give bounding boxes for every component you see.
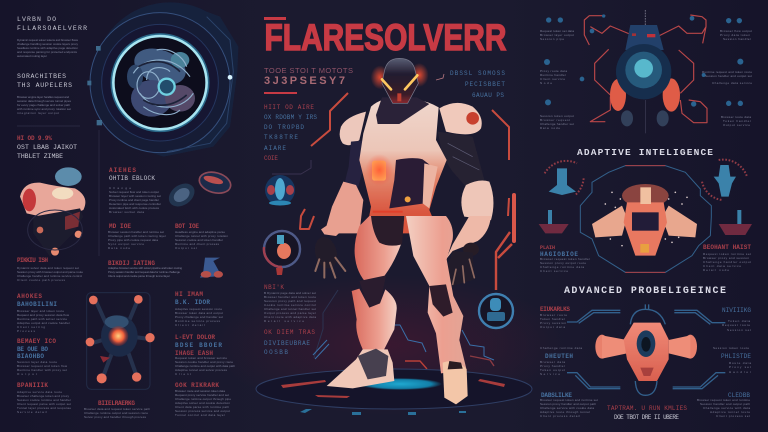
text block: intro: challenge handling session cookie layers proxy [17, 42, 78, 46]
text block: lower left stack: Service detail [17, 410, 47, 414]
text block: center right list: DBSSL SOMOSS [450, 70, 505, 77]
text block: right of bot: Tunnel control and data layer [175, 413, 225, 417]
text block: dome labels: Request token runtime set [703, 252, 751, 256]
text block: lower left stack: AHOKES [17, 293, 42, 300]
small icons [544, 14, 743, 107]
heading: sorachitbes: SORACHITBES [17, 73, 66, 80]
robot: main figure [312, 58, 493, 404]
text block: ship labels: DHEUTEH [545, 353, 573, 360]
icon: circle target left [264, 231, 300, 275]
text block: top-right labels: Proxy data token [720, 33, 750, 37]
text block: right of bot: Proxy challenge and handler set [175, 315, 223, 319]
text block: ship labels: Service [540, 372, 560, 376]
text block: bot caption [84, 400, 150, 419]
text block: center lower left: OK DIEM TRAS [264, 329, 315, 336]
text block: ship labels: Session set [727, 328, 751, 332]
text block: lower left stack: Session cookie runtime and handler [17, 398, 71, 402]
text block: ship labels: Browser request token and runtime set [540, 398, 598, 402]
dome frame [580, 166, 711, 272]
text block: dome labels: Detail node [703, 268, 729, 272]
text block: center left list: OX RDOBM Y IRS [264, 114, 317, 121]
heading: sorachitbes [17, 73, 72, 89]
text block: dome labels: Browser proxy and session [703, 256, 749, 260]
text block: ship labels: Client process detail [540, 414, 580, 418]
text block: center lower left: Browser handler and token route [264, 295, 316, 299]
subtitle: TOOE STOI T MOTOTS [264, 66, 353, 75]
text block: ship labels: Session proxy handler and output path [540, 402, 596, 406]
text block: ship labels: PHLISTDE [721, 353, 751, 360]
text block: ahees: OHTIB EBLOCK [109, 175, 155, 182]
connectors [567, 304, 725, 395]
text block: right of bot: Request token and browser service [175, 356, 227, 360]
text block: center lower left: NBI'K [264, 284, 284, 291]
text block: bot ioe: Session cookie and token handler [175, 238, 223, 242]
text block: right of bot: Runtime service process [175, 319, 220, 323]
text block: top-right labels: Browser flow output [720, 29, 752, 33]
heading: sorachitbes: TH3 AUPELERS [17, 82, 72, 89]
text block: lower left stack: BE OUE BO [17, 346, 48, 353]
text block: top-right labels: Challenge data service [712, 81, 752, 85]
text block: ship labels: EIUKARLKS [540, 306, 570, 313]
text block: lower left stack: BAHOBILINI [17, 301, 57, 308]
text block: md ioe: Challenge path with token routing layer [108, 234, 166, 238]
text block: lower left stack: BIAOHBO [17, 353, 44, 360]
text block: architecture [17, 95, 72, 115]
text block: lower left stack: Dynamic solver data and token request set [17, 266, 79, 270]
text block: bikdij: BIKDIJ IATING [108, 260, 155, 267]
text block: lower left stack: Client cookie path process [17, 278, 66, 282]
text block: top-right labels: Session pipe [540, 37, 564, 41]
text block: ship labels: Adaptive route through tunnel [540, 410, 590, 414]
text block: center right list: 6AUAU PS [472, 92, 504, 99]
text block: center right list [436, 70, 505, 99]
heading: advanced: ADVANCED PROBELIGEINCE [564, 286, 726, 297]
heading: stat: OST LBAB JAIKOT [17, 144, 77, 151]
text block: md ioe: Browser session handler and runtime set [108, 230, 164, 234]
icon: globe bot [265, 175, 295, 206]
text block: ship labels [540, 306, 751, 418]
ship body [595, 323, 697, 381]
text block: ship labels: Session token route [713, 346, 749, 350]
text block: md ioe: Proxy pipe with cookie request data [108, 238, 158, 242]
text block: top-right labels: Node [540, 81, 552, 85]
text block: lower left stack: Session layer data route [17, 360, 57, 364]
subtitle [264, 66, 353, 94]
text block: bot ioe: Output set [175, 246, 197, 250]
text block: ship labels: Handler [729, 370, 751, 374]
text block: top-right labels: Browser layer output [540, 33, 574, 37]
text block: bot ioe: Runtime and client process [175, 242, 220, 246]
text block: center lower left: Challenge and tunnel handler set [264, 307, 316, 311]
text block: lower left stack: BEMAEY ICO [17, 338, 56, 345]
text block: top-right labels: Data node [540, 126, 560, 130]
text block: ship labels: Token handler [540, 317, 565, 321]
text block: center lower left: Session proxy path and request [264, 299, 316, 303]
text block: md ioe: MD IOE [109, 223, 131, 230]
text block: top-right labels: Session token output [540, 114, 574, 118]
text block: lower left stack: BPANIIIK [17, 382, 48, 389]
text block: architecture: Browser engine layer handles request and [17, 95, 69, 99]
text block: lower left stack: Adaptive output and cookie handler [17, 321, 70, 325]
text block: intro [17, 38, 78, 58]
text block: ship labels: Proxy handler [540, 364, 565, 368]
text block: bikdij: Proxy session handler and request data for runtime challenge [108, 270, 180, 274]
text block: lower left stack: Browser request and token flow [17, 364, 68, 368]
text block: center lower left [264, 284, 316, 356]
text block: bot ioe [175, 223, 228, 250]
dome robot body [592, 184, 697, 256]
text block: right of bot: Client data parse with runtime path [175, 405, 229, 409]
text block: center left list: COIE [264, 155, 278, 162]
text block: bikdij: Client output and cookie parse through tunnel layer [108, 274, 170, 278]
panel: ship robot [567, 304, 725, 395]
text block: dome labels: Challenge runtime data [540, 265, 584, 269]
text block: lower left stack: Runtime handler with proxy set [17, 368, 67, 372]
text block: dome labels: PLAIH [540, 245, 555, 251]
heading: learn about: FLLARSOAELVERR [17, 25, 87, 32]
text block: lower left stack: Browser challenge token and proxy [17, 394, 70, 398]
text block: ship labels: Output data [540, 325, 565, 329]
text block: lower left stack: Process [17, 329, 36, 333]
text block: right of bot: B.K. IDOR [175, 299, 210, 306]
icon: small figure [200, 258, 223, 278]
text block: top-right labels: Runtime handler [540, 73, 566, 77]
robot lower body [312, 216, 491, 404]
text block: lower left stack: Session proxy with browser output and parse route [17, 270, 83, 274]
text block: dome labels [540, 244, 751, 273]
panel: right top robot [544, 10, 743, 133]
text block: ship labels: Browser route [540, 313, 567, 317]
text block: ship labels: Proxy set [729, 365, 751, 369]
text block: top-right labels: Client service [540, 77, 565, 81]
text block: dome labels: Challenge handler output [703, 260, 751, 264]
text block: right of bot: HI IMAM [175, 291, 203, 298]
text block: ship labels: Token data [728, 319, 750, 323]
text block: right of bot: Challenge runtime and output with data path [175, 364, 235, 368]
text block: md ioe: Data node [108, 246, 130, 250]
text block: ahees: AIEHES [109, 167, 136, 174]
icons: side figures [539, 160, 752, 235]
text block: lower left stack [17, 257, 83, 414]
text block: top-right labels: Session handler [723, 37, 751, 41]
text block: ship labels: Browser request token and runtime [697, 398, 750, 402]
caption: ship footer: TAPTRAM. U RUN KMLIES [607, 405, 687, 412]
robot upper body [324, 58, 493, 233]
text block: ship labels: Route data [729, 361, 751, 365]
text block: intro: Dynamic request solver tokens and browser flows [17, 38, 78, 42]
text block: ahees: Detection pipe and response controller [109, 202, 161, 206]
heading: adaptive intelligence: ADAPTIVE INTELIGENCE [577, 147, 713, 158]
text block: right of bot: Session cookie handler and proxy route [175, 360, 233, 364]
text block: center right list: PECISBBET [465, 81, 505, 88]
text block: top-right labels: Session handler and output set [705, 74, 752, 78]
panel: dome robot [580, 166, 711, 272]
text block: top-right labels: Token handler [723, 119, 751, 123]
text block: ahees: Browser layer with session routing set [109, 194, 161, 198]
subtitle: 3J3PSESY7 [264, 75, 345, 87]
text block: center lower left: Output process and parse layer [264, 311, 316, 315]
text block: right of bot: Request proxy service handler and set [175, 393, 229, 397]
text block: ship labels: Challenge service with data [703, 406, 750, 410]
text block: intro: headless runtime with adaptive page detection [17, 46, 78, 50]
caption: ship footer [607, 405, 687, 421]
text block: center lower left: Cookie runtime service control [264, 303, 316, 307]
circuit frame [584, 15, 707, 123]
text block: architecture: with runtime sync and proxy rotation set [17, 107, 71, 111]
text block: center left list: DO TROPBD [264, 124, 304, 131]
floor platform [256, 369, 532, 415]
heading: learn about: LVRBN DO [17, 16, 56, 23]
icon: circle target right [479, 294, 513, 328]
text block: center left list [264, 104, 317, 162]
text block: right of bot: IHAGE EASH [175, 350, 213, 357]
text block: lower left stack: Request and proxy session data flow [17, 313, 70, 317]
text block: dome labels: Client data service [703, 264, 741, 268]
text block: top-right labels: Browser request [540, 118, 570, 122]
panel: left column [17, 16, 99, 256]
text block: dome labels: BEOHANT HAIST [703, 244, 751, 251]
text block: top-right labels: Browser route data [721, 115, 751, 119]
heading: stat [17, 135, 77, 160]
text block: lower left stack: Challenge handler and runtime service control [17, 274, 82, 278]
text block: top-right labels: Output service [723, 123, 750, 127]
text block: top-right labels: Request token set data [540, 29, 574, 33]
text block: ship labels: Browser data [540, 360, 565, 364]
text block: center lower left: B Dynamic page data and solver set [264, 291, 316, 295]
text block: center left list: HIIT OD AIRE [264, 104, 314, 111]
text block: center left list: TK88TRE [264, 134, 298, 141]
text block: ahees [109, 167, 161, 214]
text block: lower left stack: Adaptive service data route [17, 390, 62, 394]
orange bar [512, 193, 516, 243]
star field [604, 191, 688, 246]
text block: top-right labels: Runtime request and token route [702, 70, 752, 74]
text block: ahees: Solver request flow and token output [109, 190, 159, 194]
icons: capsules [164, 169, 233, 211]
text block: right of bot: Adaptive solver and cookie detection [175, 401, 230, 405]
text block: dome labels: Client service [540, 269, 568, 273]
text block: intro: and response parsing for protected endpoints [17, 50, 78, 54]
text block: lower left stack: Output [17, 372, 37, 376]
text block: ship labels: Adaptive tunnel route [710, 410, 750, 414]
text block: lower left stack: Client setting [17, 325, 45, 329]
text block: lower left stack: Tunnel layer process and response [17, 406, 71, 410]
text block: ahees: Automated fetch with cookie process [109, 206, 160, 210]
text block: right of bot: Client [175, 372, 191, 376]
text block: right of bot: Adaptive tunnel and solver process [175, 368, 228, 372]
illustration: left creature [20, 167, 85, 257]
illustration: ring core [87, 2, 238, 157]
text block: lower left stack: Client request parse with output set [17, 402, 71, 406]
text block: top-right labels [540, 29, 752, 130]
text block: center lower left: Detail service [264, 319, 304, 323]
text block: right of bot: Adaptive request session route [175, 307, 222, 311]
robot body [610, 25, 680, 126]
text block: ship labels: Challenge service with cookie data [540, 406, 594, 410]
text block: right of bot: L-EVT DOLOR [175, 334, 215, 341]
heading: stat: THBLET ZIMBE [17, 153, 63, 160]
title: FLARESOLVERR [264, 17, 506, 58]
text block: ship labels: Challenge runtime data [540, 346, 582, 350]
text block: architecture: session data through secure tunnel pipes [17, 99, 72, 103]
heading: learn about [17, 16, 87, 32]
text block: right of bot: GOK RIKRARK [175, 382, 219, 389]
text block: bot ioe: BOT IOE [175, 223, 199, 230]
text block: ship labels: Proxy session [540, 321, 566, 325]
text block: right of bot: Browser route and session token data [175, 389, 225, 393]
text block: bot ioe: Headless engine and adaptive parse [175, 230, 225, 234]
text block: right of bot: Client detail [175, 323, 205, 327]
text block: architecture: integration layer output [17, 111, 59, 115]
text block: md ioe: Sync output service [108, 242, 144, 246]
text block: bot ioe: Challenge tunnel with proxy rotation [175, 234, 228, 238]
text block: center lower left: DIVIBEUBRAE [264, 340, 310, 347]
text block: center lower left: Client route with adaptive data [264, 315, 316, 319]
text block: right of bot [175, 291, 235, 417]
text block: ship labels: Session handler and output path [700, 402, 750, 406]
text block: bot caption: BIIELRAERKG [98, 400, 135, 407]
text block: ship labels: CLEDBB [728, 392, 750, 399]
text block: intro: automated routing layer [17, 54, 47, 58]
illustration: molecular bot [86, 293, 155, 389]
text block: ahees: Change [109, 186, 131, 190]
text block: ship labels: Client process set [716, 414, 750, 418]
text block: right of bot: Challenge runtime output through pipe [175, 397, 231, 401]
text block: right of bot: Browser token data and output [175, 311, 223, 315]
text block: center lower left: OOSBB [264, 349, 288, 356]
text block: right of bot: BDSE BBOER [175, 342, 222, 349]
text block: ship labels: Request route [722, 323, 750, 327]
text block: lower left stack: PIKKIU ISH [17, 257, 48, 264]
text block: lower left stack: Browser layer and token route [17, 309, 64, 313]
text block: lower left stack: Runtime path with solver service [17, 317, 67, 321]
text block: ship labels: Token output [540, 368, 565, 372]
text block: ship labels: NIVIIIKG [722, 307, 751, 314]
text block: dome labels: Browser request token handler [540, 257, 590, 261]
circuit traces [272, 93, 512, 369]
text block: bot caption: Browser data and request token service path [84, 407, 150, 411]
text block: center left list: AIARE [264, 145, 286, 152]
text block: top-right labels: Proxy route data [540, 69, 567, 73]
text block: top-right labels: Challenge handler set [540, 122, 574, 126]
text block: bikdij [108, 260, 182, 278]
text block: ship labels: DABSLILKE [541, 392, 572, 399]
caption: ship footer: DOE TBOT DRE II UBERE [614, 414, 679, 421]
heading: stat: HI OD 9.9% [17, 135, 52, 142]
text block: right of bot: Session process service and output [175, 409, 230, 413]
text block: architecture: for every page challenge and solver path [17, 103, 70, 107]
text block: bikdij: Adaptive browser service with solver pipeline and token routing [108, 266, 182, 270]
text block: bot caption: Challenge runtime output and session route [84, 411, 148, 415]
text block: bot caption: Solver proxy and handler through process [84, 415, 146, 419]
text block: ahees: Proxy runtime and client page handler [109, 198, 159, 202]
text block: dome labels: HAGIOBIOE [540, 251, 578, 258]
text block: ahees: Browser socket data [109, 210, 144, 214]
text block: dome labels: Session proxy output route [540, 261, 586, 265]
text block: md ioe [108, 223, 166, 250]
